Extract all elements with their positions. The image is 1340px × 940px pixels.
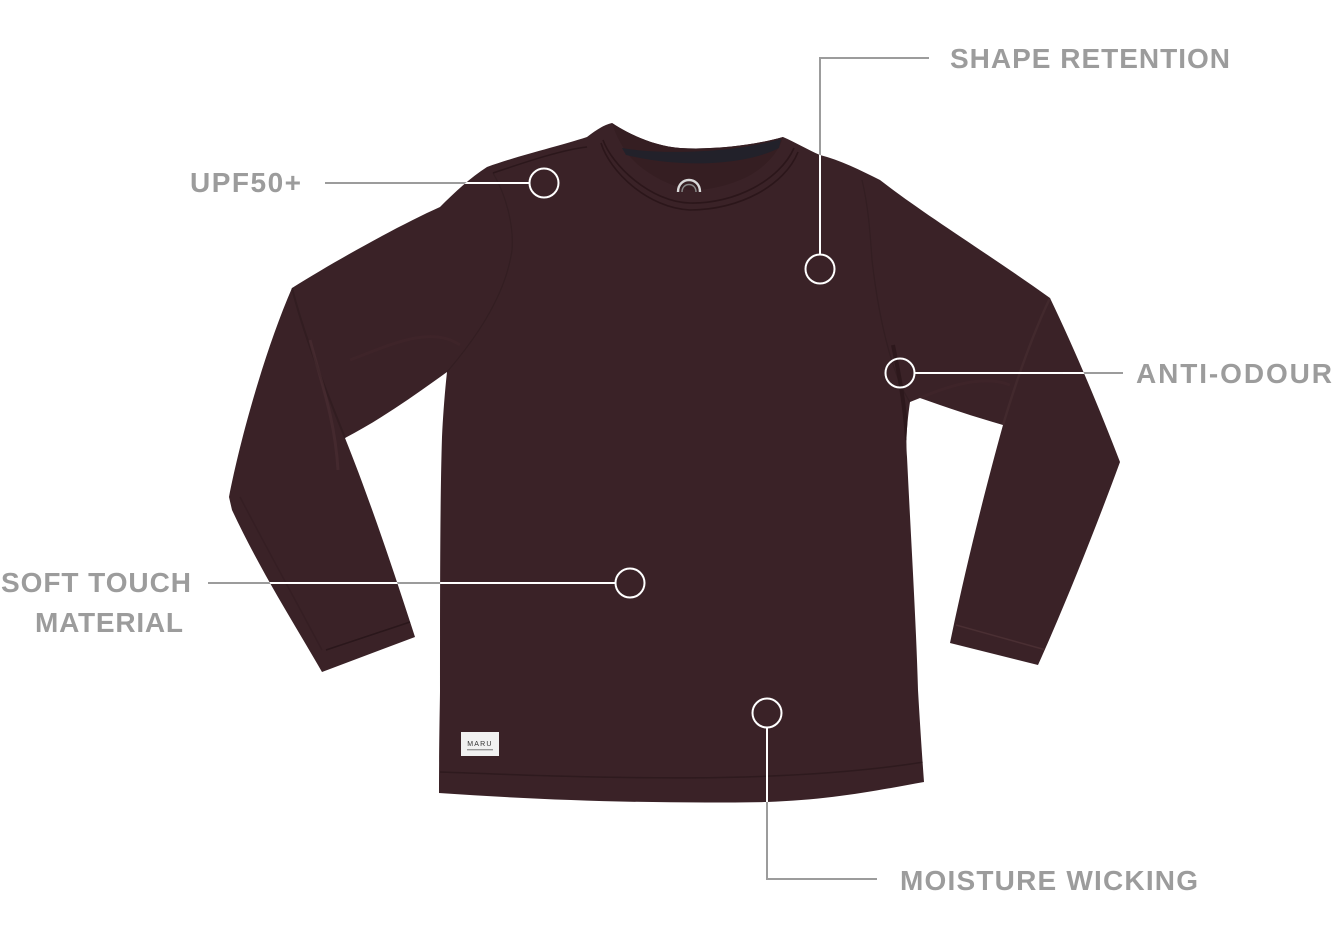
label: UPF50+ [190,167,301,198]
shirt [229,123,1120,803]
label: MATERIAL [35,607,183,638]
callout: anti-odour [886,358,1332,389]
hem label: MARU [467,741,493,748]
leader line white on shirt [464,182,529,184]
hem label [461,732,499,756]
marker [530,168,558,198]
callout: shape retention [806,43,1230,284]
fabric folds and seams [240,147,1050,778]
collar rib [601,140,798,210]
neck label logo [678,180,700,192]
marker [616,568,644,598]
callout: UPF50+ [190,167,558,198]
label: SOFT TOUCH [1,567,191,598]
neck tape [622,139,781,163]
marker [806,254,834,284]
callout: soft touch material [1,567,644,638]
leader line white on shirt [270,582,615,584]
leader line white on shirt [915,372,1084,374]
marker [886,358,914,388]
label: ANTI-ODOUR [1136,358,1332,389]
shirt body and sleeves [229,123,1120,803]
label: SHAPE RETENTION [950,43,1230,74]
leader line grey [767,728,877,879]
leader line grey [915,372,1123,374]
callout: moisture wicking [752,698,1198,896]
leader line grey [325,182,529,184]
marker [752,698,782,728]
label: MOISTURE WICKING [900,865,1198,896]
leader line grey [208,582,615,584]
leader line grey [820,58,929,255]
label [1,567,191,638]
leader line white on shirt [819,154,821,254]
leader line white on shirt [766,728,768,802]
inside back neck [612,123,783,190]
